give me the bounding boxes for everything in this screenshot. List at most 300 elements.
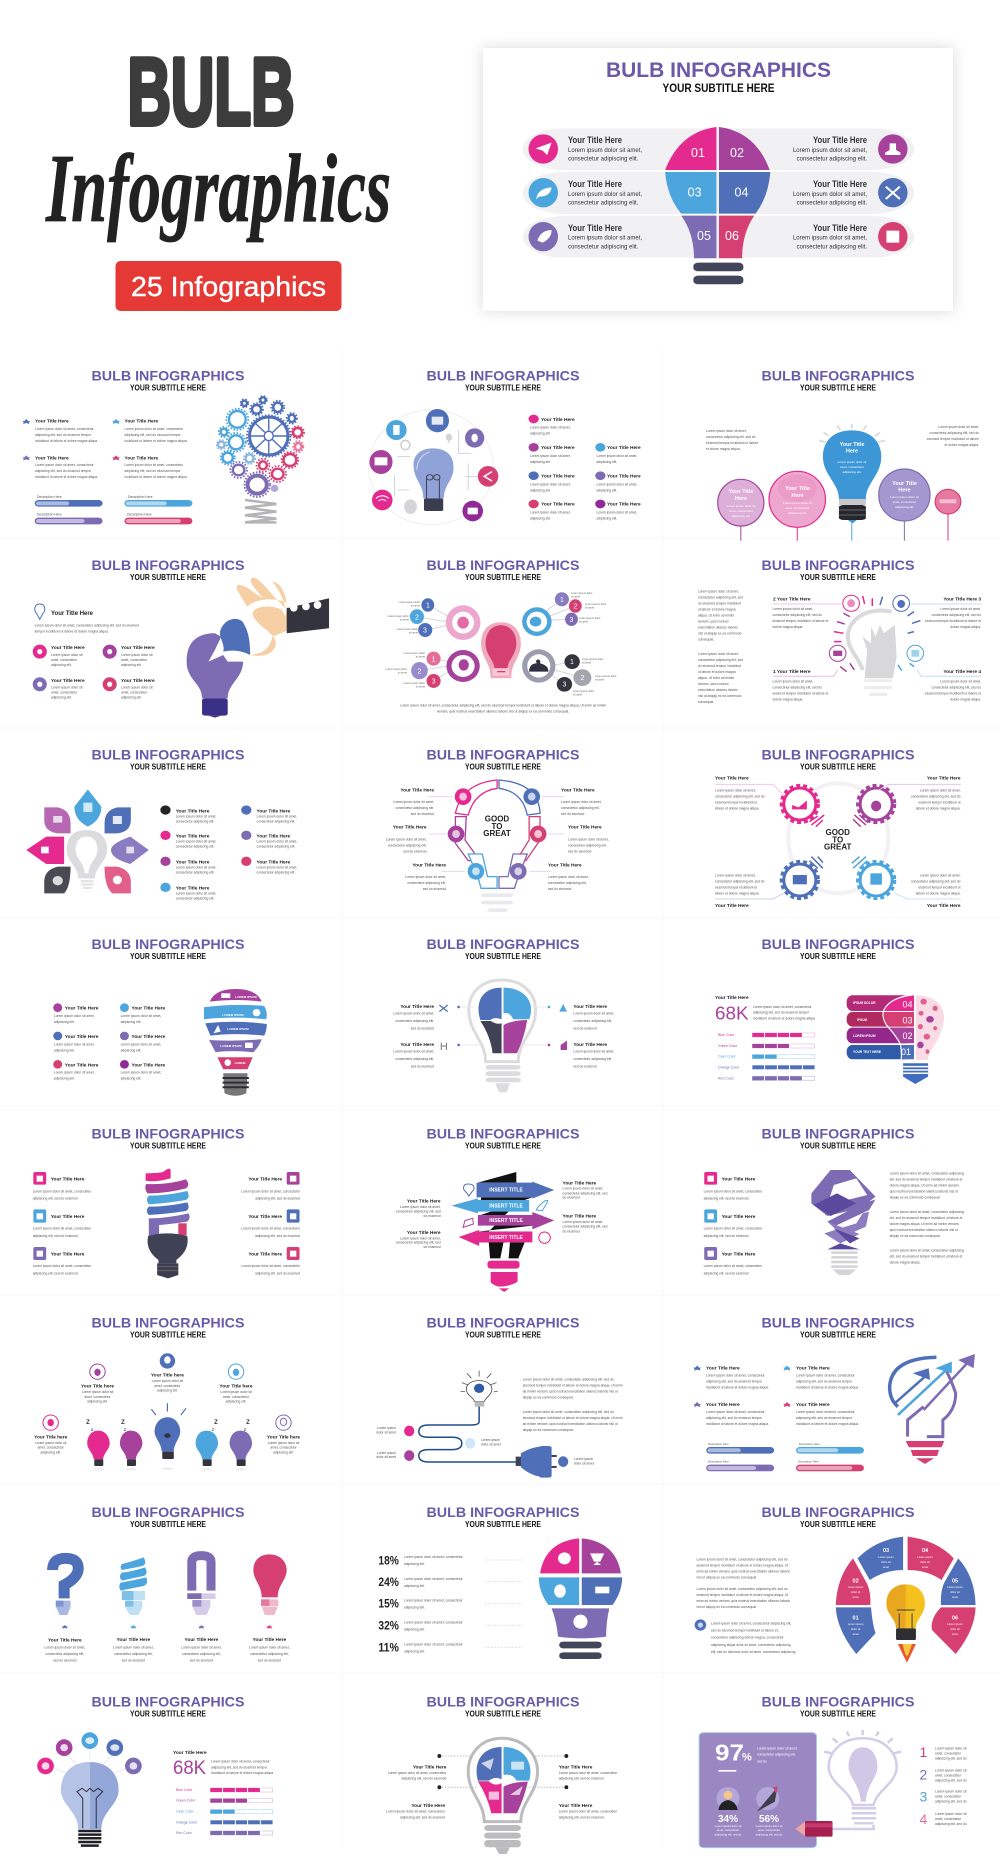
text: four items: do eiusmod — [424, 1245, 441, 1249]
text: good to great: GOOD — [485, 814, 509, 823]
text: numbered list: Your Title Here — [541, 473, 575, 479]
text: callouts and paragraphs: dolore magna aliqua. — [772, 625, 803, 629]
text: four items: Lorem ipsum dolor sit amet, — [562, 1220, 603, 1224]
text: numbered notes: adipiscing elit, sed do — [935, 1822, 967, 1826]
panel: puzzle hand bulb — [33, 557, 329, 718]
text: stack labels and numbers: IPSUM — [857, 1018, 867, 1022]
text: corner items: Your Title Here — [927, 775, 961, 781]
text: four items: Lorem ipsum dolor sit amet, consectetur — [388, 1771, 447, 1775]
text: four items: consectetur adipiscing elit, — [395, 1019, 434, 1023]
text: 68K summary and bar labels: Lorem ipsum dolor sit amet, consectetur — [211, 1760, 271, 1764]
graphic: bulb, cable, plug — [404, 1371, 568, 1478]
text: numbered notes: 4 — [920, 1811, 928, 1827]
heading — [92, 368, 244, 393]
text: paragraphs and captions: dolor sit amet — [376, 1455, 396, 1459]
text: percentage captions: Lorem ipsum dolor sit amet, consectetur — [404, 1555, 464, 1559]
panel: sleepy bulbs — [34, 1315, 300, 1471]
text: callouts and paragraphs: consectetur adipiscing elit, sed — [698, 596, 743, 600]
heading: BULB INFOGRAPHICS — [426, 557, 580, 573]
text: left column: Lorem ipsum dolor sit amet, — [568, 192, 642, 198]
heading: BULB INFOGRAPHICS — [426, 746, 580, 762]
panel: hand in bulb — [698, 557, 981, 704]
text: four items: consectetur adipiscing elit, — [114, 1652, 153, 1656]
heading: YOUR SUBTITLE HERE — [130, 1141, 207, 1150]
graphic: gears and spring — [22, 396, 304, 524]
text: five items: Your Title here — [219, 1384, 253, 1390]
text: right paragraphs: quis nostrud exercitation ullamco laboris nisi ut — [890, 1228, 958, 1232]
text: 68K summary and bar labels — [715, 995, 815, 1080]
text: cluster numbers: 3 — [570, 617, 574, 624]
heading — [426, 936, 580, 961]
text: callouts and paragraphs: Lorem ipsum dolor sit amet, — [772, 680, 813, 684]
text: stack labels and numbers: 03 — [902, 1016, 913, 1026]
heading: BULB INFOGRAPHICS — [426, 1693, 580, 1709]
text: sleeping z — [86, 1420, 250, 1432]
text: four items: Your Title Here — [185, 1637, 219, 1643]
text: numbered list: Lorem ipsum dolor sit amet, — [596, 482, 637, 486]
heading: YOUR SUBTITLE HERE — [130, 1709, 207, 1718]
text: percentage captions: adipiscing elit. — [404, 1584, 425, 1588]
text: segment labels: dolor sit — [950, 1590, 960, 1594]
text: six items: adipiscing elit, sed do eiusmod — [255, 1272, 300, 1276]
text: paragraphs and captions: dolor sit amet — [376, 1430, 396, 1434]
text: callouts and paragraphs: eiusmod tempor incididunt ut labore et — [925, 619, 981, 623]
text: six items: Your Title Here — [248, 1251, 282, 1257]
text: percentages: 32% — [378, 1619, 399, 1633]
text: four items: Your Title Here — [706, 1402, 740, 1408]
text: paragraphs and captions: dolor sit amet — [481, 1442, 501, 1446]
text: segment labels: 04 — [922, 1548, 929, 1554]
text: corner items: consectetur adipiscing elit, sed do — [715, 879, 765, 883]
text: numbered list: Lorem ipsum dolor sit amet, — [530, 454, 571, 458]
text: 68K summary and bar labels — [173, 1750, 273, 1835]
text: four items: adipiscing elit, sed do eiusmod tempor — [796, 1380, 853, 1384]
heading: BULB INFOGRAPHICS — [92, 1315, 244, 1331]
text: four items: Lorem ipsum dolor sit amet, — [400, 1205, 441, 1209]
text: right column: Your Title Here — [813, 135, 867, 145]
text: list: Lorem ipsum dolor sit — [121, 685, 153, 689]
text: four items: Lorem ipsum dolor sit amet, — [393, 1050, 434, 1054]
text: small captions and footer: Lorem ipsum dolor — [386, 667, 407, 671]
graphic: six radial segments — [695, 1537, 976, 1663]
text: callouts and paragraphs: exercitation ullamco laboris — [698, 688, 738, 692]
text: right paragraphs: elit, sed do eiusmod tempor incididunt ut labore et — [890, 1178, 962, 1182]
text: callouts and paragraphs: Lorem ipsum dolor sit amet, — [698, 652, 739, 656]
text: 68K summary and bar labels: Cyan Color — [176, 1810, 194, 1814]
heading: YOUR SUBTITLE HERE — [800, 1141, 877, 1150]
heading: YOUR SUBTITLE HERE — [130, 952, 207, 961]
text: six items: Your Title Here — [132, 1034, 166, 1040]
text: six items: Your Title Here — [51, 1214, 85, 1220]
text: list: Lorem ipsum dolor sit — [51, 653, 83, 657]
text: callouts and paragraphs: veniam, quis nostrud — [698, 620, 729, 624]
heading: YOUR SUBTITLE HERE — [800, 762, 877, 771]
text: four items: Your Title Here — [559, 1803, 593, 1809]
graphic: origami bulb — [704, 1170, 876, 1275]
text: bulb numbers: 05 — [697, 229, 711, 243]
text: six items: Lorem ipsum dolor sit amet, — [121, 1071, 161, 1075]
text: left column: Lorem ipsum dolor sit amet, — [568, 236, 642, 242]
heading: BULB INFOGRAPHICS — [762, 1315, 914, 1331]
text: small captions and footer: sit amet — [411, 604, 420, 608]
text: four items: adipiscing elit, sed do eiusmod tempor — [124, 433, 181, 437]
heading: YOUR SUBTITLE HERE — [130, 1331, 207, 1340]
text: balloon labels: Here — [846, 448, 858, 454]
text: 68K summary and bar labels: 68K — [715, 1003, 748, 1023]
text: four items: consectetur adipiscing elit, sed — [562, 1191, 608, 1195]
text: left and right items: sed do eiusmod — [561, 812, 584, 816]
text: five items: Lorem ipsum dolor sit — [152, 1379, 183, 1383]
text: segment labels: 02 — [853, 1579, 859, 1585]
text: corner items: labore et dolore magna aliqua. — [916, 891, 961, 895]
graphic: arrows over black coil — [452, 1172, 554, 1292]
text: numbered list: Your Title Here — [541, 417, 575, 423]
text: numbered notes: 3 — [920, 1788, 928, 1804]
text: four items: Description Here — [798, 1460, 819, 1464]
text: card stats: amet, consectetur — [717, 1828, 739, 1832]
panel: origami bulb — [704, 1125, 964, 1276]
text: balloon labels: Lorem ipsum dolor sit — [890, 495, 919, 499]
text: list: adipiscing elit. — [121, 663, 142, 667]
heading — [762, 1315, 914, 1340]
text: list: Lorem ipsum dolor sit amet, consectetur adipiscing elit, sed do eiusmod — [35, 623, 139, 627]
text: paragraphs: enim ad minim veniam, quis nostrud exercitation ullamco laboris — [696, 1569, 790, 1573]
text: four items: Your Title Here — [411, 1803, 445, 1809]
text: segment labels: 06 — [952, 1615, 958, 1621]
text: small captions and footer: sit amet — [409, 630, 418, 634]
text: percentage captions: adipiscing elit. — [404, 1606, 425, 1610]
text: four items: Your Title Here — [400, 1042, 434, 1048]
heading — [762, 936, 914, 961]
text: right column: Lorem ipsum dolor sit amet, — [793, 236, 867, 242]
heading: BULB INFOGRAPHICS — [92, 1125, 244, 1141]
text: callouts and paragraphs — [698, 590, 981, 704]
text: five items: Lorem ipsum dolor sit — [220, 1390, 252, 1394]
text: card stats: amet, consectetur — [758, 1828, 780, 1832]
text: corner items: consectetur adipiscing elit, sed do — [911, 795, 961, 799]
text: four items: Lorem ipsum dolor sit amet, — [113, 1645, 154, 1649]
text: six items: adipiscing elit. — [54, 1077, 75, 1081]
text: four items: Your Title Here — [413, 1764, 447, 1770]
text: small captions and footer: sit amet — [573, 692, 582, 696]
title: Infographics script: Infographics — [45, 135, 391, 243]
heading: YOUR SUBTITLE HERE — [130, 573, 207, 582]
text: callouts and paragraphs: Lorem ipsum dolor sit amet, — [772, 607, 813, 611]
text: right paragraphs — [890, 1172, 964, 1264]
text: right paragraphs: dolore magna aliqua. — [890, 1260, 920, 1264]
text: corner items: Lorem ipsum dolor sit amet, — [920, 873, 961, 877]
text: check list: consectetur adipiscing elit. — [256, 845, 295, 849]
text: check list: Your Title Here — [176, 808, 210, 814]
text: five items: amet, consectetur — [223, 1395, 250, 1399]
text: numbered list — [530, 417, 641, 521]
text: numbered list: Your Title Here — [607, 473, 641, 479]
text: percentage captions: adipiscing elit. — [404, 1562, 425, 1566]
text: cluster numbers: 3 — [563, 682, 567, 688]
graphic: central bulb with clusters — [410, 592, 591, 692]
text: bulb labels: LOREM — [235, 1061, 246, 1065]
heading: YOUR SUBTITLE HERE — [465, 1520, 542, 1529]
text: four items: adipiscing elit, sed do eiusmod — [559, 1815, 604, 1819]
text: four items: adipiscing elit, sed do eiusmod — [401, 1777, 447, 1781]
text: 68K summary and bar labels: Orange Color — [718, 1065, 740, 1069]
text: segment labels: dolor sit — [851, 1590, 861, 1594]
text: left and right items: Your Title Here — [548, 862, 582, 868]
panel: gears bulb — [22, 368, 304, 524]
panel: four bulb shapes — [44, 1504, 290, 1663]
text: cluster numbers: 3 — [432, 678, 436, 686]
text: left and right items: Lorem ipsum dolor sit amet, — [561, 800, 602, 804]
text: six items: Lorem ipsum dolor sit amet, — [54, 1042, 95, 1046]
text: left items: adipiscing elit, sed do eiusmod — [704, 1197, 749, 1201]
panel: 68K bulb with five icons — [37, 1693, 273, 1846]
text: callouts and paragraphs: consequat. — [698, 638, 714, 642]
text: list: tempor incididunt ut labore et dolore magna aliqua. — [35, 629, 109, 633]
text: right column: consectetur adipiscing elit. — [797, 200, 867, 206]
text: six items: Lorem ipsum dolor sit amet, consectetur — [241, 1189, 301, 1193]
text: six items: Lorem ipsum dolor sit amet, — [121, 1014, 161, 1018]
text: balloon labels: amet, consectetur — [786, 506, 809, 510]
text: right column: Lorem ipsum dolor sit amet, — [793, 192, 867, 198]
text: callouts and paragraphs: consectetur adipiscing elit, sed do — [772, 613, 822, 617]
text: five items: Your Title here — [267, 1435, 300, 1441]
text: left column: Your Title Here — [568, 179, 622, 189]
text: segment labels: amet — [853, 1595, 859, 1599]
panel: gear badges circle — [715, 746, 961, 909]
text: callouts and paragraphs: Lorem ipsum dolor sit amet, — [698, 590, 739, 594]
text: check list: consectetur adipiscing elit. — [176, 871, 214, 875]
text: numbered notes: 2 — [920, 1766, 928, 1782]
text: paragraphs: enim ad minim veniam, quis nostrud exercitation ullamco laboris — [696, 1599, 790, 1603]
text: callouts and paragraphs: veniam, quis nostrud — [698, 682, 729, 686]
text: callouts and paragraphs: dolore magna aliqua. — [772, 698, 803, 702]
text: segment labels: Lorem ipsum — [917, 1555, 934, 1559]
heading: YOUR SUBTITLE HERE — [465, 1331, 542, 1340]
text: four items: sed do eiusmod — [53, 1659, 77, 1663]
text: callouts and paragraphs: do eiusmod tempor incididunt — [698, 602, 741, 606]
text: balloon labels: Lorem ipsum dolor sit — [838, 460, 866, 464]
text: four items: adipiscing elit, sed do eiusmod tempor — [35, 469, 92, 473]
text: good to great: GREAT — [483, 829, 511, 838]
text: four items: adipiscing elit, sed do eiusmod tempor — [124, 469, 181, 473]
text: six items: adipiscing elit, sed do eiusmod — [33, 1272, 78, 1276]
text: balloon labels: Your Title — [785, 486, 810, 492]
text: four items: incididunt ut labore et dolore magna aliqua. — [796, 1422, 859, 1426]
text: cluster numbers: 2 — [574, 604, 578, 610]
panel: radial segments rocket bulb — [695, 1504, 976, 1663]
text: callouts and paragraphs: do eiusmod tempor incididunt — [698, 664, 741, 668]
text: 68K summary and bar labels: Green Color — [718, 1044, 738, 1048]
text: paragraphs: nisi ut aliquip ex ea commodo consequat. — [696, 1605, 757, 1609]
text: check list: Your Title Here — [176, 860, 210, 866]
text: six items: adipiscing elit. — [54, 1048, 75, 1052]
text: callouts and paragraphs: Lorem ipsum dolor sit amet, — [940, 680, 981, 684]
text: six items: Lorem ipsum dolor sit amet, — [54, 1071, 95, 1075]
graphic: gray bulb with icons and rays — [773, 595, 981, 696]
text: five items: adipiscing elit. — [40, 1451, 61, 1455]
text: numbered notes: amet, consectetur — [935, 1752, 962, 1756]
text: check list: Lorem ipsum dolor sit amet, — [176, 866, 216, 870]
text: 68K summary and bar labels: Your Title Here — [173, 1750, 207, 1756]
text: left and right items: sed do eiusmod — [548, 887, 571, 891]
text: paragraphs and captions: ad minim veniam, quis nostrud exercitation ullamco laboris nisi ut — [523, 1422, 618, 1426]
text: list: Your Title Here — [121, 645, 155, 651]
text: right column: consectetur adipiscing elit. — [797, 156, 867, 162]
text: corner items: labore et dolore magna aliqua. — [715, 807, 760, 811]
text: small captions and footer: Lorem ipsum dolor — [585, 602, 607, 606]
text: four items: Your Title Here — [124, 455, 159, 461]
panel: gray puzzle bulb with dots — [386, 1693, 618, 1854]
text: callouts and paragraphs: nisi ut aliquip ex ea commodo — [698, 632, 742, 636]
text: small captions and footer: sit amet — [416, 654, 425, 658]
text: percentages — [378, 1553, 399, 1655]
panel: arrows bulb with progress bars — [693, 1315, 975, 1471]
text: side paragraphs: eiusmod tempor incididunt ut labore — [706, 441, 758, 445]
text: 68K summary and bar labels: Lorem ipsum dolor sit amet, consectetur — [753, 1005, 813, 1009]
text: paragraphs: eiusmod tempor incididunt ut labore et dolore magna aliqua. Ut — [696, 1593, 788, 1597]
text: four items: Your Title Here — [35, 419, 69, 425]
heading: BULB INFOGRAPHICS — [92, 1693, 244, 1709]
text: bulb labels: LOREM IPSUM — [235, 995, 257, 999]
heading — [92, 746, 244, 771]
text: side paragraphs: eiusmod tempor incididunt ut labore — [927, 437, 979, 441]
text: four items: Description Here — [708, 1460, 729, 1464]
text: arrow labels: INSERT TITLE — [489, 1235, 523, 1241]
heading — [762, 1693, 914, 1718]
text: small captions and footer: sit amet — [579, 620, 588, 624]
text: list: Lorem ipsum dolor sit — [121, 653, 153, 657]
text: six items: Your Title Here — [65, 1062, 99, 1068]
text: left and right items: Lorem ipsum dolor sit amet, — [568, 838, 609, 842]
text: list: Your Title Here — [121, 678, 155, 684]
text: six items: Your Title Here — [65, 1034, 99, 1040]
text: four items: Lorem ipsum dolor sit amet, consectetur — [796, 1410, 856, 1414]
heading — [426, 368, 580, 393]
text: small captions and footer: Lorem ipsum dolor — [388, 614, 409, 618]
text: four items: sed do eiusmod — [573, 1026, 597, 1030]
text: four items — [35, 419, 188, 516]
text: paragraphs and captions: Lorem ipsum — [481, 1438, 500, 1442]
text: balloon labels: Here — [898, 488, 911, 494]
text: arrow labels: INSERT TITLE — [489, 1218, 523, 1224]
text: percentage captions: Lorem ipsum dolor sit amet, consectetur — [404, 1642, 464, 1646]
graphic: petals around bulb — [26, 789, 251, 893]
text: numbered notes — [920, 1744, 967, 1827]
text: balloon labels: adipiscing elit. — [732, 514, 751, 518]
text: 68K summary and bar labels: 68K — [173, 1758, 206, 1779]
text: corner items: consectetur adipiscing elit, sed do — [715, 795, 765, 799]
text: callouts and paragraphs: nisi ut aliquip ex ea commodo — [698, 694, 742, 698]
text: cluster numbers: 3 — [423, 628, 427, 634]
text: four items: Your Title Here — [573, 1042, 607, 1048]
text: four items: Your Title Here — [706, 1366, 740, 1372]
text: sleeping z: Z — [244, 1428, 247, 1432]
heading: BULB INFOGRAPHICS — [606, 59, 831, 82]
heading — [92, 1504, 244, 1529]
text: segment labels — [848, 1548, 964, 1636]
text: bulb labels: LOREM IPSUM — [227, 1027, 249, 1031]
text: four items: Lorem ipsum dolor sit amet, consectetur — [124, 463, 184, 467]
text: check list: Lorem ipsum dolor sit amet, — [176, 840, 216, 844]
text: corner items: consectetur adipiscing elit, sed do — [911, 879, 961, 883]
text: small captions and footer: Lorem ipsum dolor — [573, 689, 595, 693]
text: corner items: Your Title Here — [927, 903, 961, 909]
text: card stats — [715, 1740, 798, 1836]
text: four items: Your Title Here — [117, 1637, 151, 1643]
text: check list: Your Title Here — [176, 886, 210, 892]
text: bulb numbers: 02 — [730, 146, 744, 160]
text: four items: consectetur adipiscing elit, — [45, 1652, 84, 1656]
text: five items — [34, 1373, 300, 1455]
text: five items: amet, consectetur — [84, 1395, 111, 1399]
text: four items: Description Here — [127, 512, 152, 516]
text: four items: Lorem ipsum dolor sit amet, — [249, 1645, 290, 1649]
text: left and right items — [386, 787, 609, 891]
text: sleeping z: Z — [212, 1428, 215, 1432]
graphic: five-piece bulb — [486, 1538, 622, 1659]
text: six items: Lorem ipsum dolor sit amet, — [54, 1014, 95, 1018]
text: four items — [44, 1637, 290, 1663]
text: four items: Your Title Here — [48, 1638, 82, 1644]
text: numbered notes: adipiscing elit, sed do — [935, 1800, 967, 1804]
text: left items: adipiscing elit, sed do eiusmod — [704, 1234, 749, 1238]
text: numbered notes: adipiscing elit, sed do — [935, 1778, 967, 1782]
text: six items: Your Title Here — [132, 1062, 166, 1068]
heading: BULB INFOGRAPHICS — [92, 557, 244, 573]
text: four items: consectetur adipiscing elit, — [250, 1652, 289, 1656]
text: left column: consectetur adipiscing elit. — [568, 156, 639, 162]
text: paragraphs and captions: dolor sit amet — [574, 1462, 594, 1466]
text: check list: Your Title Here — [176, 834, 210, 840]
text: four items: Your Title Here — [559, 1764, 593, 1770]
text: left and right items: consectetur adipiscing elit, — [407, 881, 446, 885]
text: numbered list: adipiscing elit. — [596, 488, 617, 492]
heading: BULB INFOGRAPHICS — [762, 936, 914, 952]
text: four items: Lorem ipsum dolor sit amet, consectetur — [35, 463, 95, 467]
text: left column: consectetur adipiscing elit. — [568, 244, 639, 250]
text: callouts and paragraphs: Your Title Here 3 — [943, 596, 981, 602]
text: corner items: Lorem ipsum dolor sit amet, — [920, 789, 961, 793]
text: balloon labels: amet, consectetur — [729, 509, 753, 513]
text: small captions and footer: Lorem ipsum dolor — [579, 616, 601, 620]
text: paragraphs and captions: aliquip ex ea commodo consequat. — [523, 1428, 574, 1432]
text: cluster numbers — [415, 597, 585, 688]
text: small captions and footer: Lorem ipsum dolor — [397, 627, 418, 631]
heading: YOUR SUBTITLE HERE — [465, 1141, 542, 1150]
text: left items — [704, 1176, 763, 1276]
text: side paragraphs: consectetur adipiscing elit, sed do — [930, 431, 979, 435]
text: left column: Your Title Here — [568, 223, 622, 233]
text: card stats: 97 — [715, 1740, 744, 1766]
graphic: striped bulb — [53, 989, 267, 1096]
text: right column: Your Title Here — [813, 223, 867, 233]
graphic: five bulb characters — [43, 1353, 291, 1471]
text: numbered list: adipiscing elit. — [530, 517, 551, 521]
text: left column: Your Title Here — [568, 135, 622, 145]
text: paragraphs: nisi ut aliquip ex ea commodo consequat. — [696, 1575, 757, 1579]
text: 68K summary and bar labels: Green Color — [176, 1799, 196, 1803]
text: balloon labels: Here — [791, 493, 804, 499]
panel: puzzle bulb four quadrants — [393, 936, 614, 1092]
text: numbered notes: Lorem ipsum dolor sit — [935, 1790, 967, 1794]
text: six items: Your Title Here — [248, 1176, 282, 1182]
heading — [762, 1504, 914, 1529]
text: four items: Description Here — [37, 495, 62, 499]
heading: BULB INFOGRAPHICS — [426, 368, 580, 384]
text: corner items: eiusmod tempor incididunt ut — [715, 885, 757, 889]
graphic: outlined puzzle bulb — [437, 1738, 568, 1854]
text: corner items: eiusmod tempor incididunt ut — [715, 801, 757, 805]
